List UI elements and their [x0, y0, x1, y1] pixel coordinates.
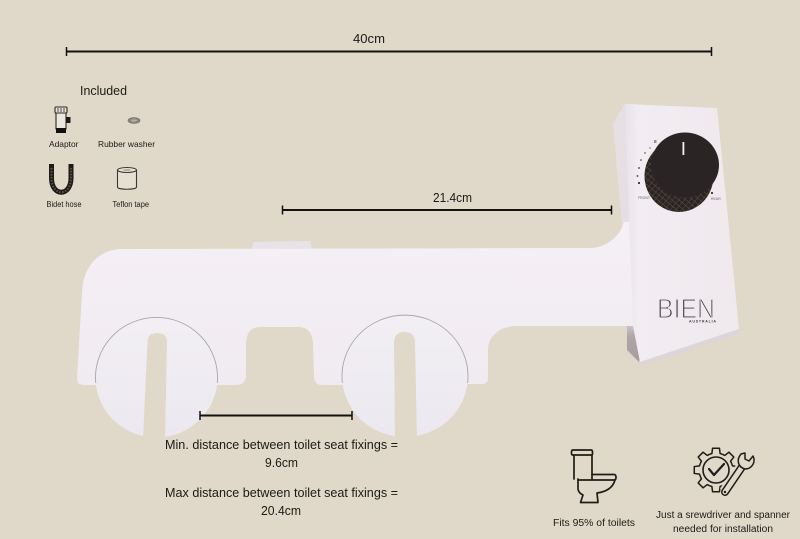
text: maximum fixing distance	[165, 486, 398, 518]
label: teflon tape: Teflon tape	[112, 200, 149, 209]
heading: included: Included	[80, 83, 127, 98]
text: maximum fixing distance: 20.4cm	[261, 504, 301, 518]
scale labels: FRONT	[638, 196, 651, 200]
label: tools needed	[656, 510, 791, 535]
feature: fits most toilets	[553, 450, 635, 529]
dimension: overall length 40cm	[66, 32, 712, 56]
icon: gear with check and spanner	[694, 448, 754, 493]
knurled knob base	[644, 140, 714, 212]
icon: toilet	[572, 450, 616, 502]
dimension: overall length 40cm: 40cm	[353, 32, 385, 46]
label: tools needed: Just a srewdriver and spanner	[656, 510, 791, 521]
knob top	[651, 132, 719, 198]
text: minimum fixing distance	[165, 438, 398, 470]
knob indicator	[682, 142, 684, 155]
rear tab	[252, 241, 312, 249]
included accessories	[46, 83, 155, 209]
brand logo: BIEN	[657, 293, 715, 324]
icon: adaptor	[55, 107, 70, 133]
icon: rubber washer	[128, 118, 140, 124]
control body side face	[613, 104, 645, 362]
left seat fixing disc	[96, 317, 218, 440]
text: minimum fixing distance: 9.6cm	[265, 456, 298, 470]
scale labels: REAR	[711, 197, 721, 201]
label: fits toilets: Fits 95% of toilets	[553, 518, 635, 529]
scale labels	[638, 196, 721, 201]
label: tools needed: needed for installation	[673, 524, 773, 535]
rotary knob	[637, 132, 721, 212]
product: bidet attachment	[77, 104, 739, 440]
label: adaptor: Adaptor	[49, 139, 79, 149]
label: bidet hose: Bidet hose	[46, 200, 82, 209]
icon: bidet hose	[52, 164, 71, 192]
feature: tools needed	[656, 448, 791, 535]
dimension: arm length 21.4cm: 21.4cm	[433, 191, 472, 205]
dimension: fixing distance bar	[200, 411, 352, 420]
label: rubber washer: Rubber washer	[98, 139, 155, 149]
icon: teflon tape	[118, 168, 136, 189]
mounting plate	[77, 222, 640, 385]
brand logo: AUSTRALIA	[689, 320, 716, 324]
scale dots	[637, 140, 713, 194]
right seat fixing disc	[342, 315, 468, 440]
text: maximum fixing distance: Max distance between toilet seat fixings =	[165, 486, 398, 500]
text: minimum fixing distance: Min. distance between toilet seat fixings =	[165, 438, 398, 452]
dimension: arm length 21.4cm	[282, 191, 612, 214]
control body front face	[625, 104, 739, 362]
